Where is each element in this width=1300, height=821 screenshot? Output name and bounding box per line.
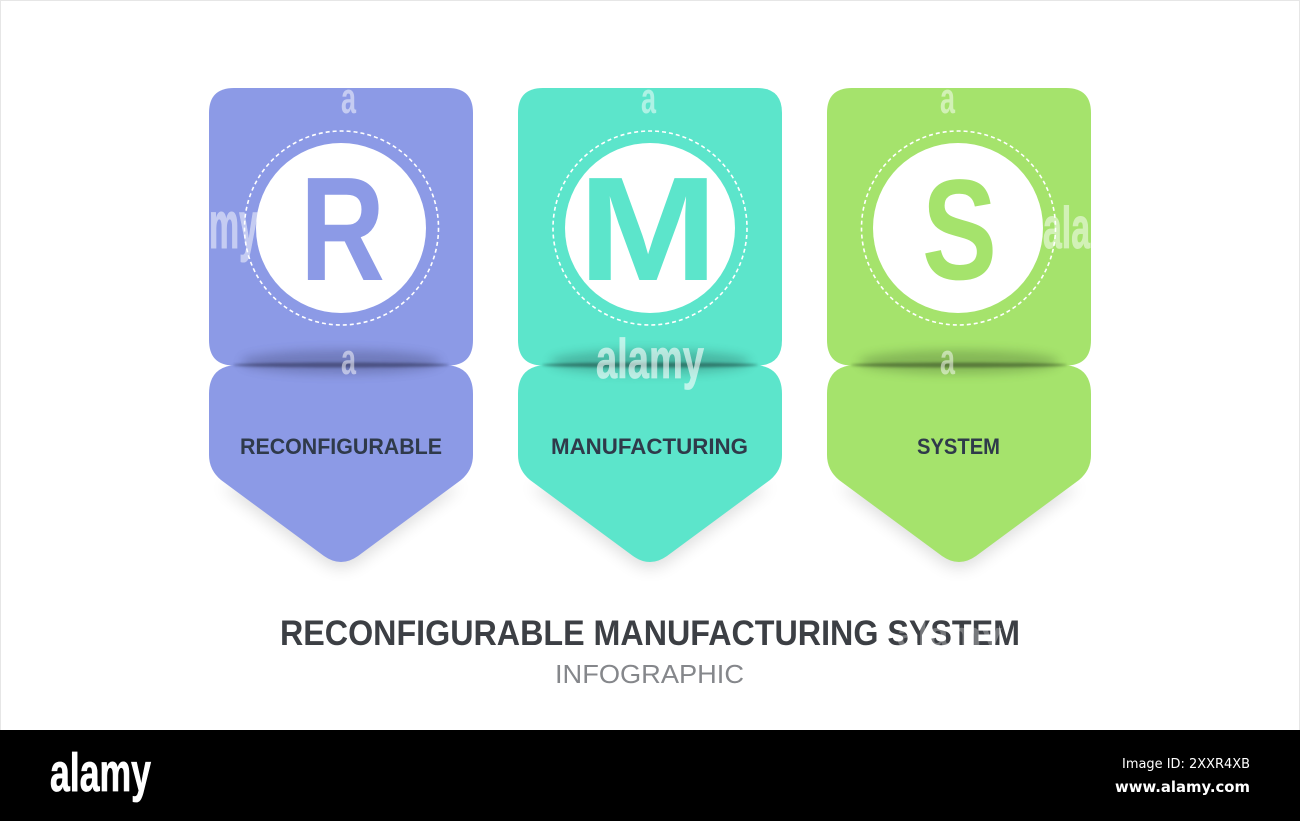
top card xyxy=(518,88,782,366)
watermark fragment: ala xyxy=(1043,196,1090,261)
website: www.alamy.com xyxy=(1115,778,1250,796)
fold shadow xyxy=(233,350,449,374)
top card xyxy=(209,88,473,366)
watermark alamy: alamy xyxy=(596,327,704,390)
arrow card xyxy=(518,365,782,562)
arrow shadow xyxy=(839,486,1079,568)
white circle xyxy=(565,143,735,313)
watermark a lower: a xyxy=(940,335,955,384)
fold shadow xyxy=(851,350,1067,374)
subtitle: INFOGRAPHIC xyxy=(555,659,744,689)
top card xyxy=(827,88,1091,366)
watermark a: a xyxy=(341,74,356,123)
arrow card xyxy=(209,365,473,562)
dashed ring xyxy=(862,131,1056,325)
letter M: M xyxy=(578,147,718,312)
watermark a: a xyxy=(940,74,955,123)
fold shadow xyxy=(542,350,758,374)
watermark a lower: a xyxy=(341,335,356,384)
letter S: S xyxy=(922,151,997,310)
white circle xyxy=(256,143,426,313)
image id: Image ID: 2XXR4XB xyxy=(1122,757,1250,772)
panel: S system xyxy=(827,74,1091,568)
arrow card xyxy=(827,365,1091,562)
label: SYSTEM xyxy=(917,434,1000,459)
title watermark: alamy xyxy=(897,616,1002,654)
letter R: R xyxy=(300,147,385,312)
watermark a: a xyxy=(641,74,656,123)
panel: R reconfigurable xyxy=(209,74,473,568)
footer logo: alamy xyxy=(50,743,151,803)
arrow shadow xyxy=(221,486,461,568)
dashed ring xyxy=(553,131,747,325)
panel: M manufacturing xyxy=(518,74,782,568)
title: RECONFIGURABLE MANUFACTURING SYSTEM xyxy=(280,614,1020,653)
arrow shadow xyxy=(530,486,770,568)
footer bar xyxy=(0,730,1300,821)
dashed ring xyxy=(244,131,438,325)
white circle xyxy=(873,143,1043,313)
watermark fragment: my xyxy=(209,188,258,263)
label: MANUFACTURING xyxy=(551,434,748,459)
label: RECONFIGURABLE xyxy=(240,434,442,459)
